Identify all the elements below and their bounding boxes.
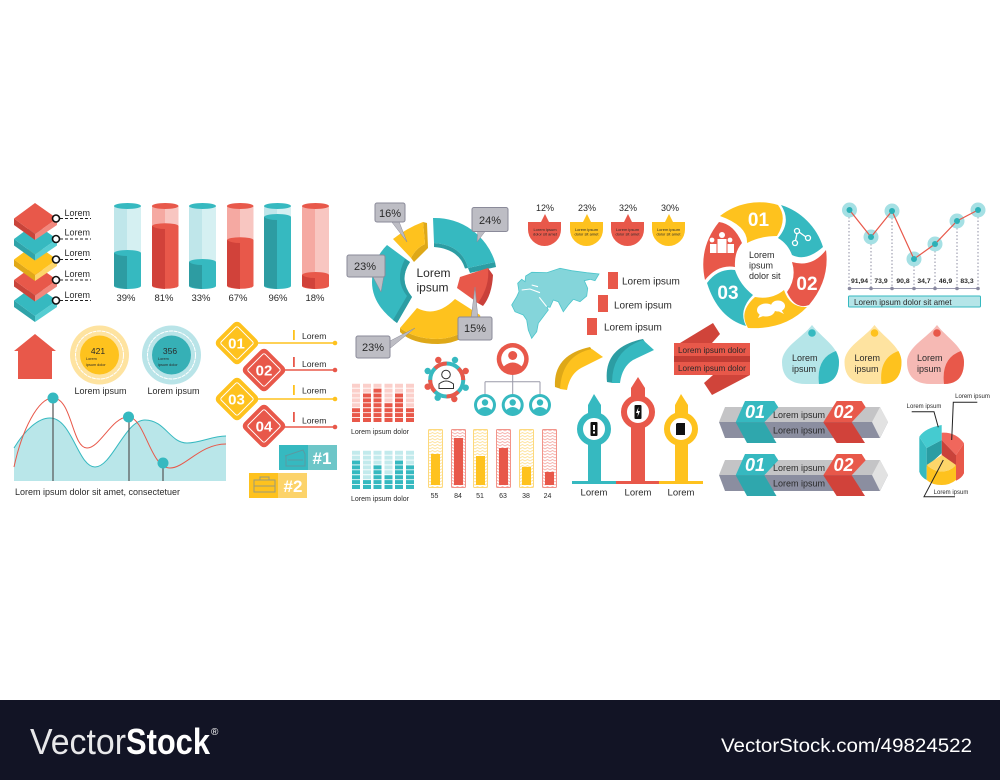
item 01: Lorem	[302, 331, 326, 341]
pie labels: Lorem ipsum	[955, 394, 990, 400]
callout 16%	[375, 203, 407, 242]
band 01: 01	[745, 455, 765, 475]
callout 23% left: 23%	[354, 261, 376, 273]
red line	[14, 398, 226, 468]
badge 23%: 23%	[578, 203, 596, 213]
stat circle 421: ipsum dolor	[86, 363, 106, 367]
badge 12%: 12%	[536, 203, 554, 213]
callout 23% left	[347, 255, 385, 292]
cylinder 18%	[302, 203, 329, 304]
bar 63: 63	[499, 493, 507, 500]
band 02	[823, 401, 866, 443]
ribbon	[674, 323, 750, 395]
badge 30%: 30%	[661, 203, 679, 213]
up arrow house	[14, 334, 56, 379]
ribbon: Lorem ipsum dolor	[678, 364, 746, 373]
badge 32%	[611, 203, 644, 246]
cylinder 96%: 96%	[268, 293, 288, 304]
map legend: Lorem ipsum	[622, 276, 680, 288]
badge 23%: Lorem ipsum	[575, 227, 599, 232]
percent badges	[528, 203, 685, 246]
stat circle 356: Lorem ipsum	[147, 386, 200, 396]
logo: Vector	[30, 721, 126, 762]
yellow slice	[927, 455, 956, 485]
band labels: Lorem ipsum	[773, 463, 825, 473]
segment share	[778, 205, 823, 257]
callout 15%: 15%	[464, 323, 486, 335]
cylinder 33%	[189, 203, 216, 304]
pie labels	[907, 394, 990, 496]
world map	[512, 268, 599, 338]
stack labels: Lorem	[64, 228, 90, 238]
band 02: 02	[833, 455, 854, 475]
item 01	[214, 320, 337, 366]
numbers: 02	[796, 274, 818, 295]
line	[850, 210, 978, 259]
item 02	[241, 347, 337, 393]
caption box	[848, 296, 980, 307]
item 03: Lorem	[302, 386, 326, 396]
layer 5 teal	[14, 285, 57, 322]
segment chat	[744, 290, 807, 328]
dot line chart	[842, 202, 986, 307]
bar 38: 38	[522, 493, 530, 500]
center text: ipsum	[749, 260, 773, 270]
map legend	[587, 272, 680, 335]
badge 12%: Lorem ipsum	[533, 227, 557, 232]
band 02	[823, 454, 866, 496]
callout 15%	[458, 287, 492, 340]
values: 73,9	[874, 278, 888, 285]
tag #2: #2	[284, 477, 302, 496]
pointers	[572, 377, 703, 498]
segment 01	[720, 202, 783, 243]
tag #1	[279, 445, 337, 470]
band 01: 01	[745, 402, 765, 422]
footer bar	[0, 700, 1000, 780]
cylinder 39%: 39%	[116, 293, 136, 304]
numbers	[717, 210, 818, 304]
band labels	[773, 410, 825, 436]
cylinder chart	[114, 203, 329, 304]
teardrop red: ipsum	[917, 364, 941, 374]
band 01	[736, 401, 778, 443]
stat circle 356: Lorem	[158, 357, 169, 361]
segment red 15%	[457, 268, 493, 306]
item 04: Lorem	[302, 416, 326, 426]
pie labels: Lorem ipsum	[934, 490, 968, 496]
stat circle 356: ipsum dolor	[158, 363, 178, 367]
teardrop yellow: ipsum	[854, 364, 879, 374]
badge 32%: 32%	[619, 203, 637, 213]
donut chart	[347, 203, 508, 358]
area	[14, 418, 226, 481]
pointer yellow: Lorem	[668, 488, 695, 498]
tag #1: #1	[313, 449, 331, 468]
stack labels: Lorem	[64, 290, 90, 300]
cylinder 67%: 67%	[228, 293, 248, 304]
segment people	[703, 222, 742, 280]
red equalizer: Lorem ipsum dolor	[351, 429, 410, 436]
tag #2	[249, 473, 307, 498]
callout 23% bottom	[356, 328, 415, 358]
guides	[849, 210, 978, 288]
area and line chart	[14, 392, 226, 497]
pie label lines	[912, 402, 977, 497]
center label	[416, 266, 451, 294]
pointer teal: Lorem	[581, 488, 608, 498]
callout 24%	[472, 208, 508, 242]
segment yellow 16%	[393, 222, 428, 262]
teardrop teal	[782, 325, 839, 384]
layer 3 yellow	[14, 244, 57, 281]
icon: people	[710, 232, 734, 253]
center text	[749, 250, 781, 281]
badge 12%	[528, 203, 561, 246]
halos	[842, 202, 986, 266]
stat circle 421	[70, 326, 129, 396]
segment 02	[787, 250, 827, 306]
values: 83,3	[960, 278, 974, 285]
center label: Lorem	[416, 266, 451, 280]
center text: dolor sit	[749, 271, 781, 281]
person 3	[529, 394, 551, 416]
stack labels: Lorem	[64, 208, 90, 218]
bar 51: 51	[476, 493, 484, 500]
person 1	[474, 394, 496, 416]
stack labels	[52, 208, 91, 304]
values: 90,8	[896, 278, 910, 285]
person gear icon	[423, 357, 470, 403]
stat circle 421: Lorem	[86, 357, 97, 361]
callout 23% bottom: 23%	[362, 342, 384, 354]
layer 4 red	[14, 264, 57, 302]
logo: Stock	[126, 721, 211, 762]
item 01: 01	[228, 336, 245, 352]
cylinder 96%	[264, 203, 291, 304]
pointer red: Lorem	[625, 488, 652, 498]
badge 23%	[570, 203, 603, 246]
center label: ipsum	[416, 280, 449, 294]
item 02: 02	[256, 362, 272, 380]
map legend: Lorem ipsum	[604, 322, 662, 334]
badge 32%: dolor sit amet	[615, 232, 640, 236]
layer stack	[14, 203, 91, 322]
badge 23%: dolor sit amet	[574, 232, 599, 236]
badge 12%: dolor sit amet	[533, 232, 558, 236]
band labels	[773, 463, 825, 488]
arc teal	[607, 339, 654, 383]
bar 84: 84	[454, 493, 462, 500]
teardrop yellow: Lorem	[854, 353, 880, 363]
band 02: 02	[833, 402, 854, 422]
cylinder 67%	[227, 203, 254, 304]
red equalizer	[351, 383, 410, 436]
item 03	[214, 376, 337, 422]
teardrop yellow	[844, 325, 902, 384]
values: 91,94	[851, 278, 868, 285]
teal equalizer	[351, 450, 410, 503]
markers	[48, 392, 168, 481]
values	[851, 278, 974, 285]
teardrop red: Lorem	[917, 353, 943, 363]
segment yellow bottom	[400, 299, 481, 344]
pie labels: Lorem ipsum	[907, 404, 941, 410]
caption box: Lorem ipsum dolor sit amet	[854, 298, 952, 307]
teal slice	[919, 425, 942, 480]
numbered diamonds	[214, 320, 337, 449]
icon: share	[792, 228, 810, 246]
stat circle 356: 356	[163, 346, 177, 356]
vertical progress bars	[428, 430, 556, 500]
cylinder 39%	[114, 203, 141, 304]
red slice	[942, 433, 964, 481]
numbers: 01	[748, 210, 769, 231]
item 04	[241, 403, 337, 449]
numbers: 03	[717, 283, 739, 304]
stack labels: Lorem	[64, 269, 90, 279]
chart caption: Lorem ipsum dolor sit amet, consectetuer	[15, 487, 180, 497]
stat circle 421: Lorem ipsum	[74, 386, 127, 396]
values: 46,9	[939, 278, 952, 285]
arrow band row 2	[719, 454, 888, 496]
band labels: Lorem ipsum	[773, 410, 825, 420]
center text: Lorem	[749, 250, 775, 260]
badge 30%: dolor sit amet	[656, 232, 681, 236]
ribbon: Lorem ipsum dolor	[678, 346, 746, 355]
item 03: 03	[228, 392, 245, 408]
image id: VectorStock.com/49824522	[721, 735, 972, 757]
segment teal left	[372, 245, 412, 323]
cylinder 18%: 18%	[305, 293, 325, 304]
stat circle 356	[142, 326, 201, 396]
baseline	[848, 287, 980, 290]
band 01	[736, 454, 778, 496]
teardrop red	[907, 325, 964, 384]
person 2	[502, 394, 524, 416]
layer 2 teal	[14, 224, 57, 260]
top person	[497, 343, 529, 375]
band labels: Lorem ipsum	[773, 426, 825, 436]
stat circle 421: 421	[91, 346, 105, 356]
logo: ®	[211, 727, 219, 738]
map legend: Lorem ipsum	[614, 300, 672, 312]
circular cycle diagram	[703, 202, 827, 328]
segment teal 24%	[433, 218, 496, 273]
badge 30%: Lorem ipsum	[657, 227, 681, 232]
arrow band row 1	[719, 401, 888, 443]
segment 03	[707, 270, 753, 326]
layer 1 red	[14, 203, 57, 240]
bar 55: 55	[431, 493, 438, 500]
teardrop teal: Lorem	[792, 353, 818, 363]
item 04: 04	[256, 418, 273, 436]
cylinder 81%	[152, 203, 178, 304]
cylinder 33%: 33%	[191, 293, 211, 304]
org chart	[474, 343, 551, 416]
badge 32%: Lorem ipsum	[616, 227, 640, 232]
icon: chat	[757, 300, 785, 318]
band labels: Lorem ipsum	[773, 478, 825, 488]
3d pie chart	[907, 394, 990, 497]
cylinder 81%: 81%	[154, 293, 174, 304]
callout 24%: 24%	[479, 215, 501, 227]
values: 34,7	[917, 278, 931, 285]
item 02: Lorem	[302, 359, 326, 369]
logo	[30, 721, 219, 762]
badge 30%	[652, 203, 685, 246]
arc yellow	[555, 347, 603, 390]
dots	[846, 207, 981, 262]
bar 24: 24	[544, 493, 551, 500]
callout 16%: 16%	[379, 208, 401, 220]
teal equalizer: Lorem ipsum dolor	[351, 496, 410, 503]
stack labels: Lorem	[64, 248, 90, 258]
teardrop teal: ipsum	[792, 364, 816, 374]
